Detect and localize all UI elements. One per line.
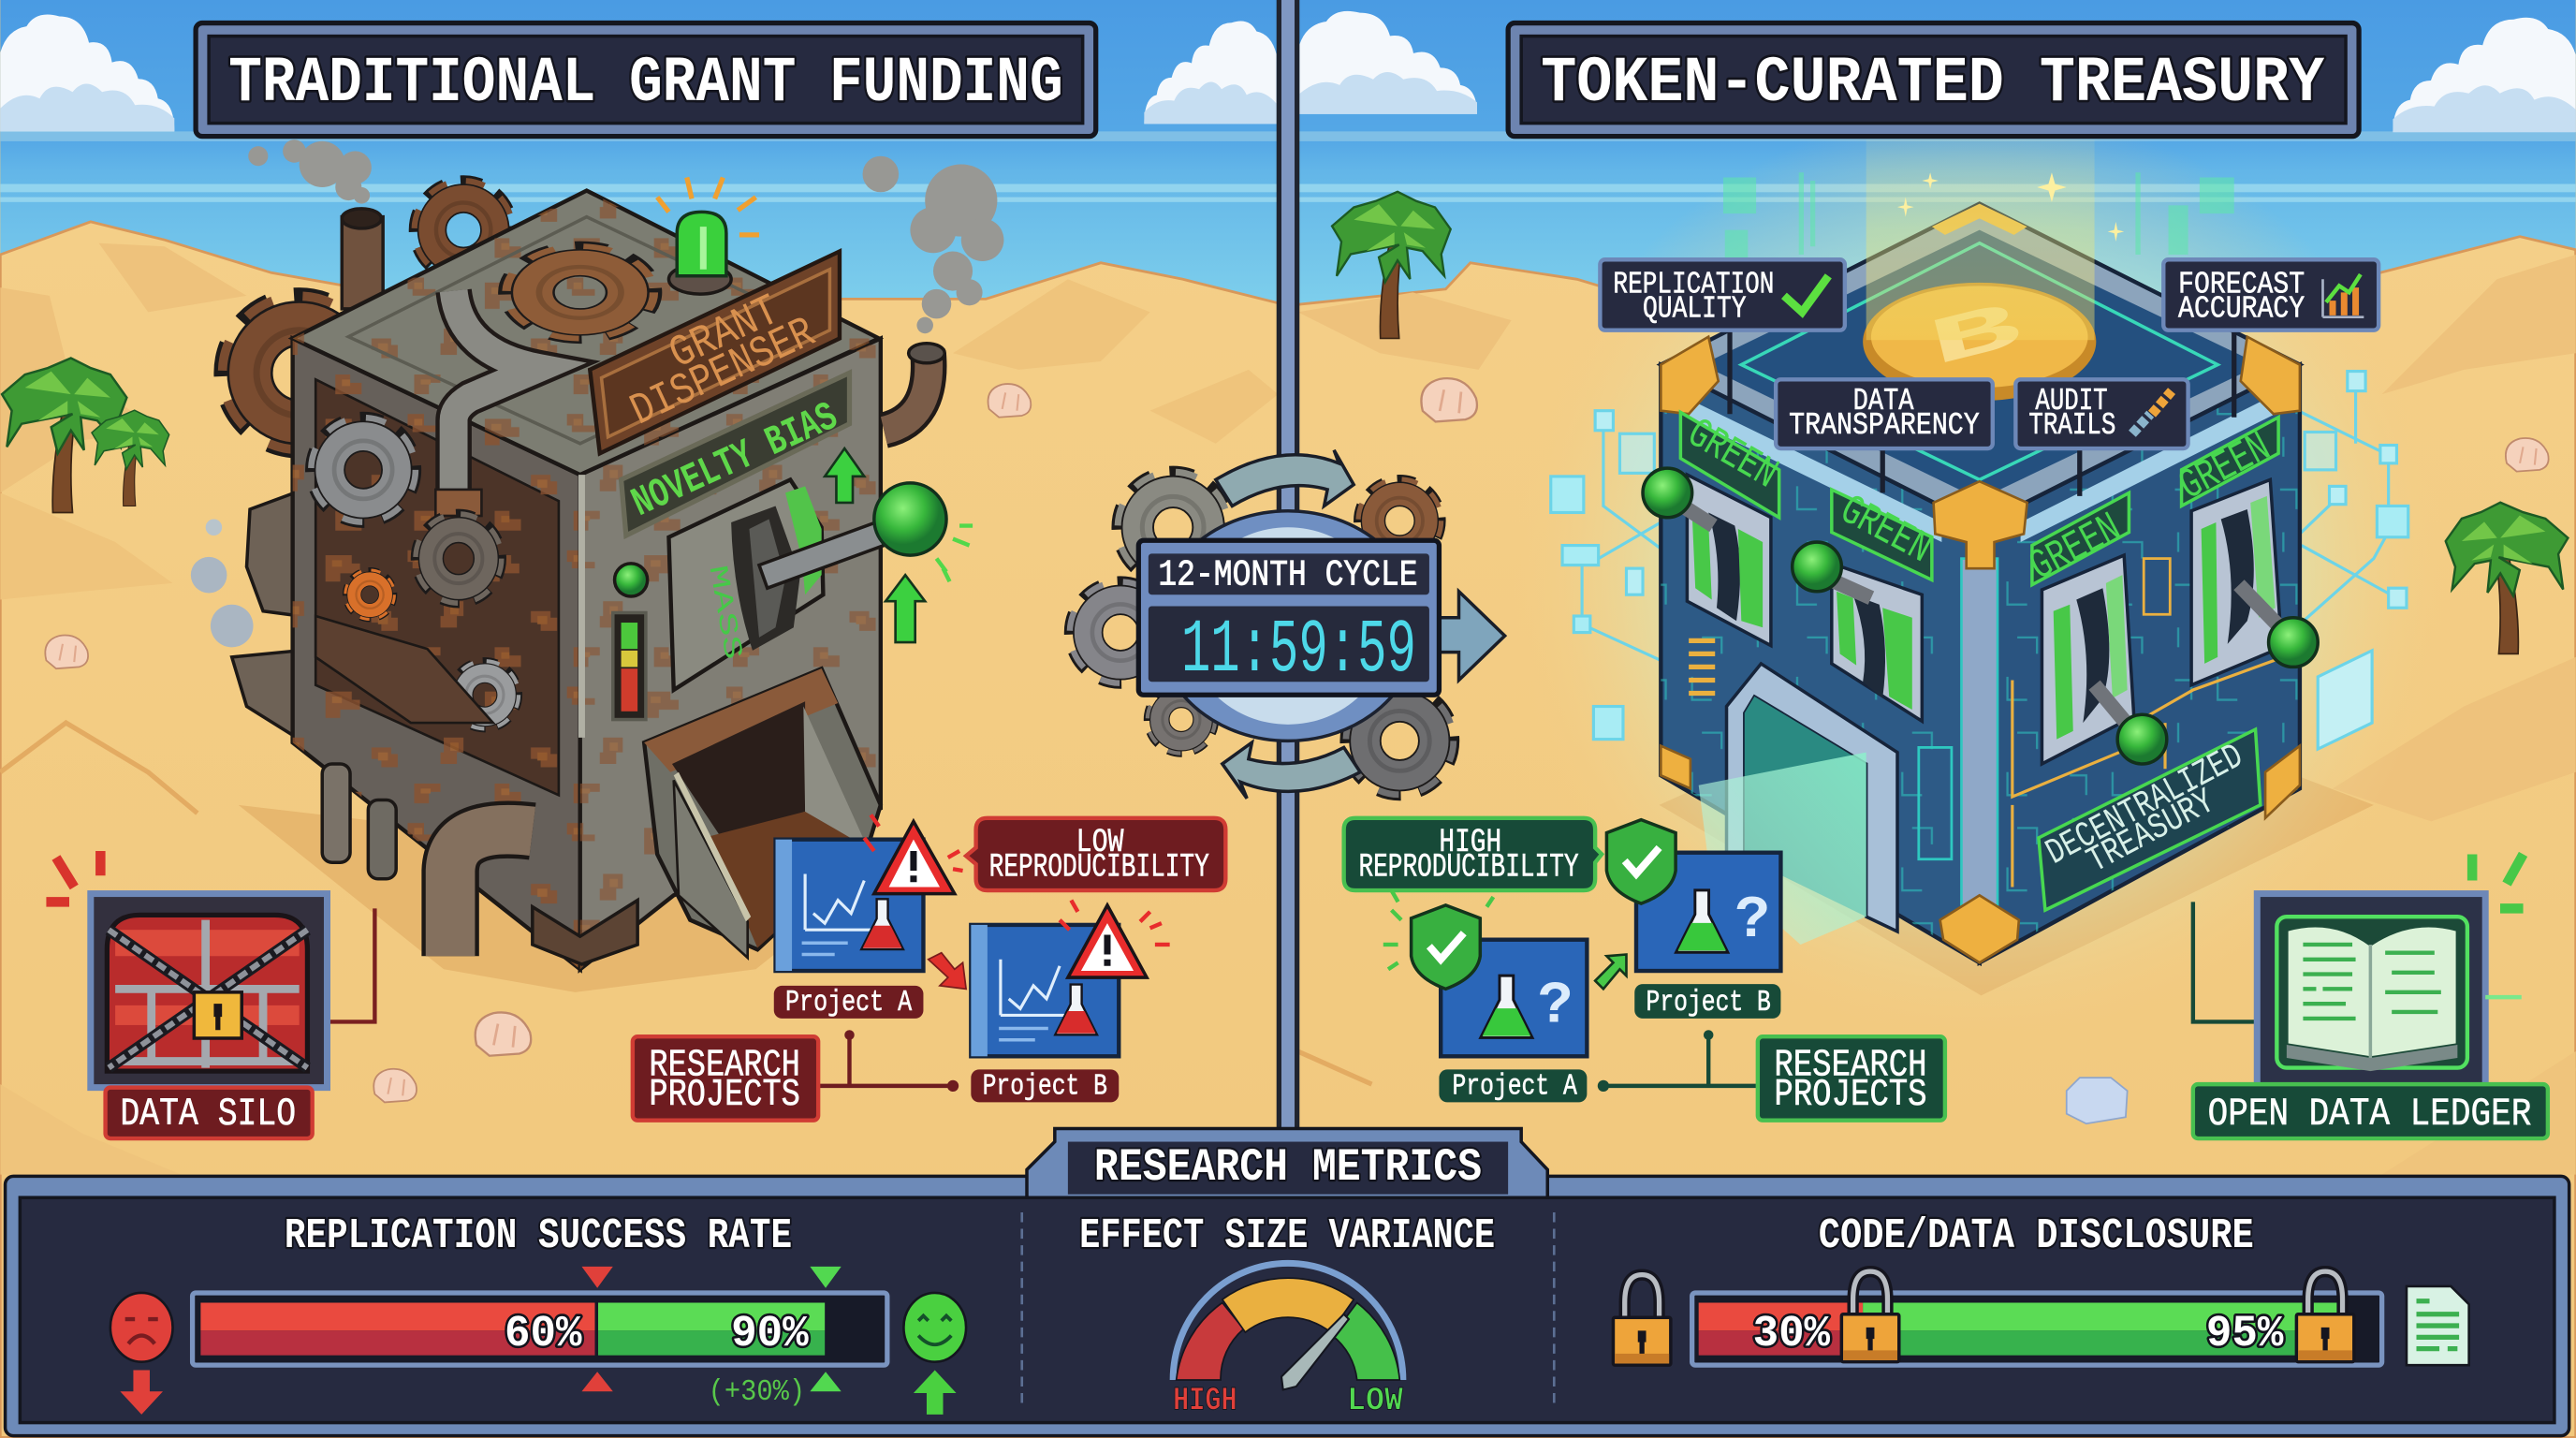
data silo card: DATA SILO xyxy=(120,1092,296,1137)
callout: low reproducibility: LOW xyxy=(1076,824,1124,861)
arrow right xyxy=(1439,592,1505,680)
markers xyxy=(581,1267,613,1391)
sign: novelty bias xyxy=(622,373,849,536)
icon: happy face xyxy=(903,1293,966,1362)
gauge: HIGH xyxy=(1173,1383,1237,1420)
icon: document xyxy=(2407,1286,2469,1365)
label xyxy=(2193,1084,2548,1138)
label: project B: Project B xyxy=(983,1071,1107,1104)
connector xyxy=(2193,902,2256,1021)
tab: research metrics: RESEARCH METRICS xyxy=(1094,1141,1482,1194)
icon: open lock xyxy=(1612,1275,1673,1367)
metric: effect size variance: EFFECT SIZE VARIANCE xyxy=(1079,1211,1495,1260)
sign: decentralized treasury xyxy=(2039,729,2261,910)
green switch 2 xyxy=(1793,486,1939,721)
top face xyxy=(293,191,879,475)
dial xyxy=(1157,511,1419,741)
timer panel: 12-MONTH CYCLE xyxy=(1158,555,1418,596)
research projects: traditional xyxy=(633,814,1225,1121)
gold corners xyxy=(1661,337,2300,962)
title: token-curated treasury xyxy=(1508,23,2359,137)
frame xyxy=(2257,894,2485,1086)
title: traditional grant funding xyxy=(196,23,1096,137)
indicator light xyxy=(615,564,648,596)
icon: sad face xyxy=(110,1293,173,1362)
label: project B: Project B xyxy=(1647,987,1771,1020)
label: replication quality xyxy=(1600,259,1845,330)
label: data transparency: TRANSPARENCY xyxy=(1789,408,1980,444)
panel: research metrics xyxy=(6,1128,2569,1436)
metric: replication success rate: REPLICATION SUCCESS RATE xyxy=(285,1211,792,1260)
recessed panel xyxy=(315,379,559,795)
metric: effect size variance xyxy=(1079,1211,1495,1420)
bar: 95% xyxy=(2206,1310,2284,1359)
green switch 4 xyxy=(2172,418,2318,685)
center column xyxy=(1961,559,1998,912)
bar: 60% xyxy=(505,1310,582,1359)
machine: decentralized treasury xyxy=(1512,107,2448,1043)
blueprint A xyxy=(776,840,923,971)
label: replication quality: REPLICATION xyxy=(1613,267,1774,302)
bar: 30% xyxy=(1753,1310,1831,1359)
palm trees xyxy=(2,192,2568,653)
panel details xyxy=(1689,559,2283,888)
center divider xyxy=(1277,0,1299,1134)
label: research projects xyxy=(1758,1036,1945,1121)
right face xyxy=(580,338,881,969)
sign: novelty bias: NOVELTY BIAS xyxy=(625,394,845,528)
metric: code/data disclosure xyxy=(1612,1211,2469,1367)
open data ledger card: OPEN DATA LEDGER xyxy=(2208,1092,2531,1137)
alert marks xyxy=(46,851,100,902)
shield A xyxy=(1383,890,1493,989)
LED strip xyxy=(613,613,646,720)
label: audit trails: TRAILS xyxy=(2028,408,2115,444)
label: forecast accuracy: FORECAST xyxy=(2178,267,2305,302)
arrow xyxy=(1595,954,1626,989)
frame xyxy=(91,894,327,1088)
label: replication quality: QUALITY xyxy=(1643,292,1747,328)
warning B xyxy=(1060,901,1170,977)
arrow: up 2 xyxy=(886,575,925,642)
sparkles xyxy=(1897,172,2124,242)
label: research projects: PROJECTS xyxy=(1774,1074,1927,1117)
side face right xyxy=(1980,365,2300,962)
delta label: (+30%) xyxy=(709,1376,805,1409)
machine: grant dispenser xyxy=(230,178,973,969)
shells and rocks xyxy=(45,378,2549,1123)
book xyxy=(2276,917,2467,1071)
callout: low reproducibility xyxy=(966,818,1225,890)
alert marks xyxy=(2472,854,2524,908)
glowing door xyxy=(1699,664,1897,945)
dividers xyxy=(1022,1212,1554,1410)
bar xyxy=(1692,1293,2382,1365)
gauge: LOW xyxy=(1347,1383,1404,1420)
green switch 3: GREEN xyxy=(2022,504,2129,592)
label: forecast accuracy: ACCURACY xyxy=(2178,292,2305,328)
green switch 1: GREEN xyxy=(1679,409,1786,499)
green switch 1 xyxy=(1643,409,1786,646)
12-month cycle clock xyxy=(1075,450,1505,799)
light beam xyxy=(1866,139,2095,340)
side gears xyxy=(315,423,515,726)
sign: decentralized treasury: TREASURY xyxy=(2081,781,2221,882)
left bulges xyxy=(232,486,313,740)
blueprint B: ? xyxy=(1734,887,1770,954)
bitcoin coin xyxy=(1863,283,2096,401)
exhaust pipes xyxy=(322,764,533,956)
icon: marker lock 30 xyxy=(1840,1271,1901,1363)
side nodes xyxy=(2485,996,2522,998)
metric: code/data disclosure: CODE/DATA DISCLOSURE xyxy=(1819,1211,2254,1260)
label: data transparency: DATA xyxy=(1853,384,1914,419)
foot block xyxy=(533,901,637,964)
sign: grant dispenser: DISPENSER xyxy=(623,309,823,437)
blueprint A xyxy=(1441,940,1587,1056)
tab: research metrics xyxy=(1027,1128,1547,1197)
arrow xyxy=(929,953,966,989)
label: research projects: RESEARCH xyxy=(1774,1044,1927,1087)
left face xyxy=(293,338,580,969)
chest xyxy=(107,915,307,1071)
bar xyxy=(193,1293,887,1365)
arrow: down xyxy=(120,1370,163,1415)
lever assembly xyxy=(668,479,973,690)
lever assembly: MASS xyxy=(701,564,747,662)
blueprint A: ? xyxy=(1538,972,1573,1039)
sign: grant dispenser: GRANT xyxy=(663,286,787,380)
connector xyxy=(1598,1030,1756,1092)
gauge xyxy=(1173,1263,1404,1420)
connectors for top labels xyxy=(1730,329,2234,496)
label: research projects: RESEARCH xyxy=(649,1044,800,1087)
title: traditional grant funding: TRADITIONAL GRANT FUNDING xyxy=(228,47,1063,120)
label: project A: Project A xyxy=(1452,1071,1577,1104)
arrow: up 1 xyxy=(825,448,864,503)
green switch 3 xyxy=(2022,492,2167,764)
machine ground shadows xyxy=(239,657,2374,995)
data silo card xyxy=(46,851,374,1138)
green switch 4: GREEN xyxy=(2172,423,2278,511)
network nodes left xyxy=(1551,411,1661,740)
smoke plumes xyxy=(248,139,1003,333)
blueprint B xyxy=(1636,853,1780,971)
clouds xyxy=(0,11,2576,132)
open data ledger card xyxy=(2193,854,2548,1138)
warning A xyxy=(864,814,963,894)
label: audit trails: AUDIT xyxy=(2035,384,2108,419)
label: data transparency xyxy=(1776,379,1993,448)
label: audit trails xyxy=(2015,379,2188,448)
blueprint B xyxy=(971,925,1119,1056)
beacon light xyxy=(657,178,759,294)
sign: decentralized treasury: DECENTRALIZED xyxy=(2040,736,2250,874)
label: project A: Project A xyxy=(785,987,912,1020)
bitcoin coin: B xyxy=(1923,290,2029,385)
timer panel: 11:59:59 xyxy=(1181,609,1416,694)
gears xyxy=(1075,477,1448,789)
cycle arrow bottom xyxy=(1222,742,1360,799)
background: sky xyxy=(0,0,2576,312)
chute xyxy=(644,668,881,958)
metric: replication success rate xyxy=(110,1211,966,1415)
connector xyxy=(820,1030,959,1092)
top face xyxy=(1661,204,2300,526)
shield B xyxy=(1606,820,1676,903)
research projects: token curated xyxy=(1344,818,1945,1121)
rear gears and chimney xyxy=(230,185,507,442)
glow halo xyxy=(1512,107,2448,1043)
label xyxy=(106,1088,313,1138)
side face left xyxy=(1661,365,1980,962)
green switch 2: GREEN xyxy=(1832,486,1939,574)
connector xyxy=(329,908,374,1021)
callout: high reproducibility: REPRODUCIBILITY xyxy=(1358,848,1579,886)
bar: 90% xyxy=(731,1310,809,1359)
callout: high reproducibility: HIGH xyxy=(1439,824,1501,861)
label: forecast accuracy xyxy=(2163,259,2378,330)
sign: grant dispenser xyxy=(590,251,840,453)
label: research projects: PROJECTS xyxy=(649,1074,800,1117)
edge highlights xyxy=(1679,394,2276,542)
top gear xyxy=(514,251,646,334)
pipes xyxy=(454,291,539,496)
floating hologram icons xyxy=(1723,172,2234,259)
title: token-curated treasury: TOKEN-CURATED TREASURY xyxy=(1541,47,2324,120)
callout: high reproducibility xyxy=(1344,818,1602,890)
corner highlight xyxy=(578,475,585,738)
cycle arrow top xyxy=(1216,450,1354,506)
label: research projects xyxy=(633,1036,818,1121)
network nodes right xyxy=(2298,372,2408,749)
panel frame xyxy=(6,1176,2569,1436)
timer panel xyxy=(1138,540,1439,695)
arrow: up xyxy=(914,1370,957,1415)
icon: marker lock 95 xyxy=(2295,1271,2356,1363)
callout: low reproducibility: REPRODUCIBILITY xyxy=(989,848,1209,886)
